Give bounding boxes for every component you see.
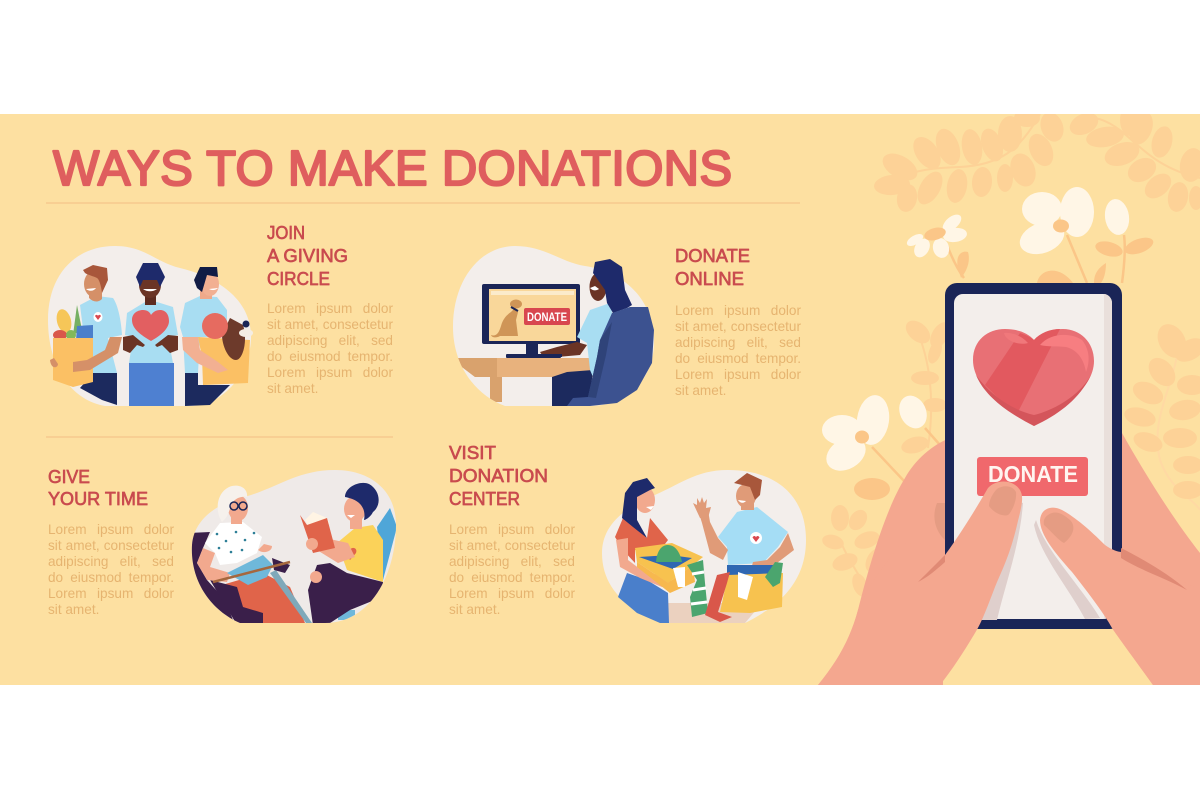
heading: give your time (48, 466, 148, 509)
donate button: DONATE (988, 461, 1078, 487)
person: center volunteer (123, 263, 178, 406)
blob (48, 246, 251, 406)
chair (567, 307, 654, 406)
heading: join a giving circle: CIRCLE (267, 268, 330, 289)
illustration: giving circle volunteers (48, 246, 253, 406)
book (305, 512, 330, 528)
illustration: visit donation center (602, 470, 806, 623)
text block: join a giving circle: sit amet. (267, 381, 318, 396)
blob (192, 470, 396, 623)
toy box (182, 313, 253, 385)
man with box (693, 473, 794, 622)
text block: visit donation center: sit amet. (449, 602, 500, 617)
text block: join a giving circle: Lorem ipsum dolor (267, 365, 393, 380)
divider (46, 202, 800, 204)
text block: give your time: Lorem ipsum dolor (48, 522, 174, 537)
text block: give your time: sit amet, consectetur (48, 538, 174, 553)
heading: visit donation center (449, 442, 548, 509)
heading: join a giving circle: JOIN (267, 222, 305, 243)
hand: left back fingers (818, 438, 955, 685)
background band (0, 114, 1200, 685)
floor (668, 603, 762, 623)
text block: join a giving circle: sit amet, consectetur (267, 317, 393, 332)
branch: top left (873, 109, 1067, 214)
text block: give your time: Lorem ipsum dolor (48, 586, 174, 601)
donate button (977, 457, 1088, 496)
text block: donate online: adipiscing elit, sed (675, 335, 801, 350)
heart held (132, 310, 169, 341)
text block: give your time: sit amet. (48, 602, 99, 617)
phone in hands (818, 283, 1200, 685)
text block: visit donation center: sit amet, consectetur (449, 538, 575, 553)
heading: join a giving circle: A GIVING (267, 245, 348, 266)
illustration: give your time (188, 470, 397, 625)
left donation box (635, 543, 708, 617)
text block: join a giving circle (267, 301, 393, 396)
monitor (482, 284, 580, 358)
woman with box (615, 478, 672, 623)
decorative foliage (821, 104, 1200, 613)
branch: lower left (822, 505, 879, 596)
flowers (820, 187, 1155, 500)
text block: give your time: do eiusmod tempor. (48, 570, 174, 585)
text block: donate online (675, 303, 801, 398)
flower: lower left (820, 391, 940, 500)
text block: join a giving circle: adipiscing elit, sed (267, 333, 393, 348)
flower: daisy (905, 211, 969, 278)
heading: donate online (675, 245, 750, 289)
illustration: donate online (450, 246, 654, 406)
heading: give your time: GIVE (48, 466, 90, 487)
heading: visit donation center: VISIT (449, 442, 496, 463)
grocery bag (50, 305, 122, 387)
dog (491, 300, 522, 337)
blob (602, 470, 806, 623)
hand: right back fingers (1100, 433, 1200, 685)
text block: donate online: do eiusmod tempor. (675, 351, 801, 366)
heading: donate online: DONATE (675, 245, 750, 266)
text block: visit donation center: adipiscing elit, sed (449, 554, 575, 569)
branch: behind phone left (902, 320, 945, 454)
flower: large top (1015, 187, 1155, 284)
person: left volunteer (50, 265, 122, 405)
text block: donate online: sit amet. (675, 383, 726, 398)
phone screen (954, 294, 1112, 619)
text block: join a giving circle: do eiusmod tempor. (267, 349, 393, 364)
text block: give your time (48, 522, 174, 617)
elderly woman (188, 486, 312, 625)
thumb shadows (975, 500, 1100, 620)
heading: visit donation center: CENTER (449, 488, 520, 509)
knitting (227, 555, 273, 585)
text block: donate online: sit amet, consectetur (675, 319, 801, 334)
phone body (945, 283, 1122, 629)
text block: donate online: Lorem ipsum dolor (675, 367, 801, 382)
donate button: DONATE (527, 310, 567, 324)
heart (973, 329, 1094, 426)
young reader (300, 483, 383, 625)
branch: right side (1124, 324, 1200, 499)
text block: visit donation center (449, 522, 575, 617)
right donation box (705, 562, 783, 622)
divider (46, 436, 393, 438)
hand: right thumb (1040, 508, 1200, 685)
text block: visit donation center: Lorem ipsum dolor (449, 586, 575, 601)
heading: join a giving circle (267, 222, 348, 289)
text block: give your time: adipiscing elit, sed (48, 554, 174, 569)
heading: donate online: ONLINE (675, 268, 744, 289)
blue chair (338, 508, 397, 620)
text block: visit donation center: do eiusmod tempor. (449, 570, 575, 585)
desk (450, 358, 596, 402)
hand: left thumb (818, 482, 1022, 685)
text block: join a giving circle: Lorem ipsum dolor (267, 301, 393, 316)
person: right volunteer (180, 267, 253, 406)
text block: visit donation center: Lorem ipsum dolor (449, 522, 575, 537)
blob (453, 246, 654, 406)
title: WAYS TO MAKE DONATIONS (53, 142, 732, 196)
heading: give your time: YOUR TIME (48, 488, 148, 509)
heading: visit donation center: DONATION (449, 465, 548, 486)
person at computer (517, 259, 654, 406)
text block: donate online: Lorem ipsum dolor (675, 303, 801, 318)
branch: top right (1070, 114, 1200, 212)
